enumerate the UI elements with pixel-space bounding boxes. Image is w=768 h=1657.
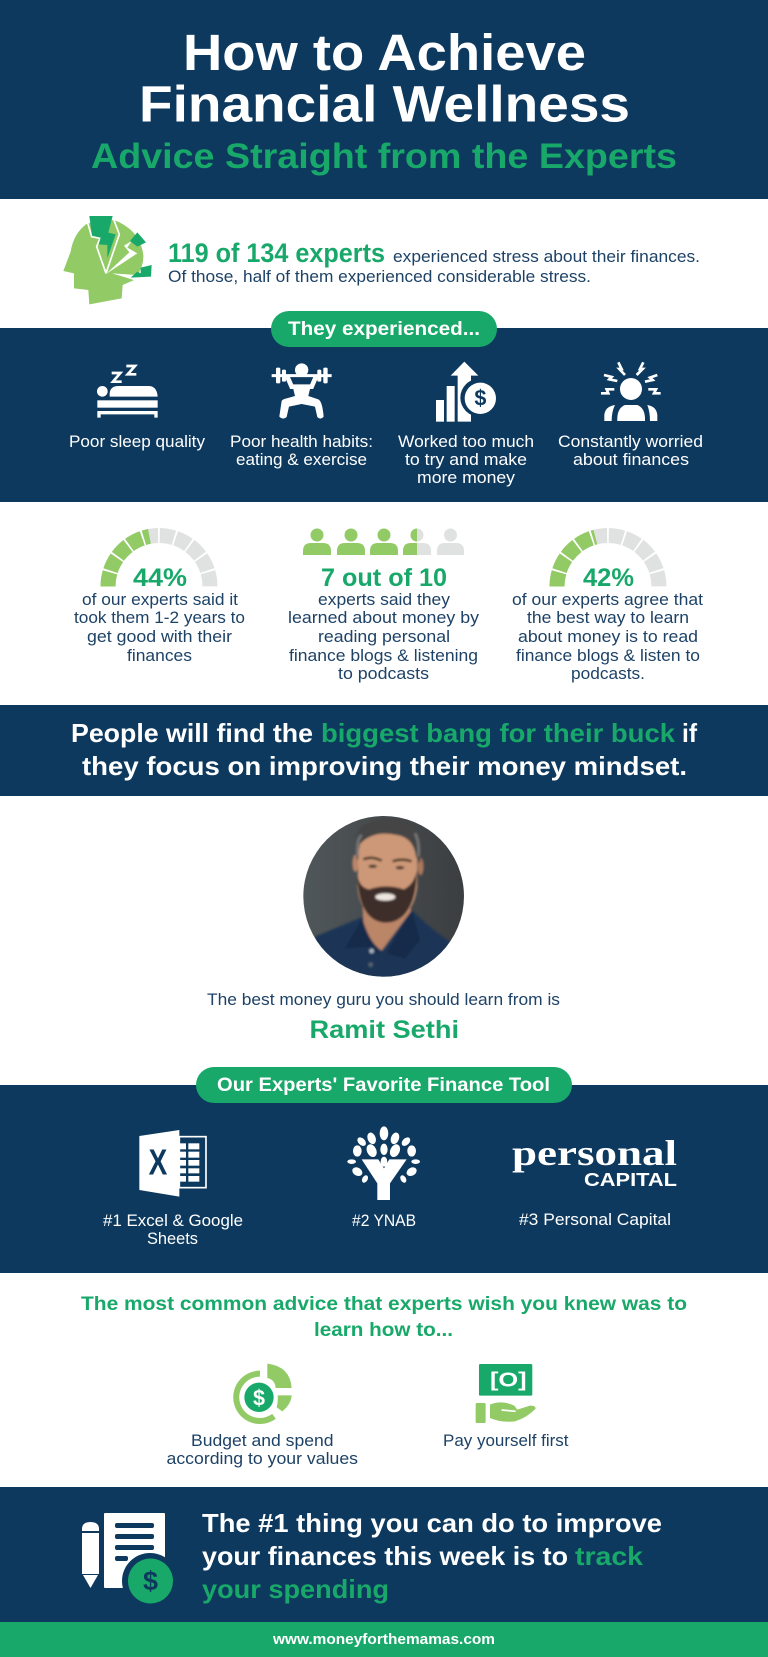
- title: [139, 24, 630, 132]
- label: constantly worried: [558, 432, 703, 469]
- pill heading: [196, 1067, 572, 1103]
- subtitle: Advice Straight from the Experts: [91, 137, 677, 176]
- gauge: 44 percent: 44%: [133, 564, 187, 592]
- label: ynab: #2 YNAB: [352, 1211, 416, 1230]
- text: 7 out of 10: experts said they: [318, 590, 451, 609]
- icon: spending tracker: [82, 1513, 178, 1609]
- statistic text: experienced stress about their finances.: [393, 247, 700, 266]
- text: 42 percent: the best way to learn: [527, 608, 689, 627]
- logo: Personal Capital: personal: [512, 1133, 677, 1173]
- gauge: 42 percent: [557, 536, 659, 592]
- gauge: 44 percent: [108, 536, 210, 592]
- icon: spending tracker: $: [143, 1566, 158, 1596]
- label: worked too much: [398, 432, 534, 487]
- guru intro text: The best money guru you should learn from is: [207, 990, 560, 1009]
- label: excel: #1 Excel & Google: [103, 1211, 243, 1230]
- statistic text: [168, 238, 700, 286]
- icon: YNAB tree: [347, 1126, 420, 1200]
- panel: statistics: [74, 528, 703, 683]
- text: 44 percent: get good with their: [87, 627, 232, 646]
- label: worked too much: to try and make: [405, 450, 527, 469]
- pill heading: They experienced...: [288, 319, 480, 340]
- text: 7 out of 10: [288, 590, 480, 683]
- icon: rising bars and coin: $: [474, 386, 486, 411]
- icon: budget pie: $: [253, 1385, 265, 1410]
- panel: header: [0, 0, 768, 199]
- logo: Personal Capital: CAPITAL: [584, 1170, 677, 1190]
- action text: The #1 thing you can do to improve: [202, 1508, 662, 1538]
- label: poor sleep: Poor sleep quality: [69, 432, 206, 451]
- footer: www.moneyforthemamas.com: [272, 1631, 495, 1648]
- panel: money mindset banner: [0, 705, 768, 796]
- panel: money mindset banner: biggest bang for their buck: [321, 718, 676, 748]
- pill heading: Our Experts' Favorite Finance Tool: [217, 1075, 550, 1096]
- photo: Ramit Sethi portrait: [303, 816, 464, 977]
- label: budget: [166, 1431, 358, 1468]
- icon: worried person: [601, 362, 661, 421]
- label: poor health: Poor health habits:: [230, 432, 373, 451]
- text: 7 out of 10: to podcasts: [338, 664, 429, 683]
- panel: they experienced: [0, 311, 768, 502]
- text: 44 percent: [74, 590, 245, 665]
- icon: weightlifter: [272, 363, 332, 419]
- panel: common advice: [81, 1293, 687, 1468]
- label: excel: [103, 1211, 243, 1248]
- text: 42 percent: about money is to read: [518, 627, 698, 646]
- text: 7 out of 10: reading personal: [318, 627, 450, 646]
- text: 44 percent: finances: [127, 646, 192, 665]
- heading: The most common advice that experts wish you knew was to: [81, 1293, 687, 1315]
- pictogram: people: [303, 528, 464, 555]
- icon: stressed head: [63, 216, 152, 304]
- label: budget: according to your values: [166, 1449, 358, 1468]
- title: How to Achieve: [183, 24, 586, 81]
- panel: number one action: [0, 1487, 768, 1622]
- text: 42 percent: of our experts agree that: [512, 590, 703, 609]
- panel: money mindset banner: if: [682, 718, 697, 748]
- panel: money mindset banner: People will find the: [71, 718, 313, 748]
- icon: budget pie: [236, 1364, 292, 1421]
- heading: [81, 1293, 687, 1341]
- icon: money in hand: [O]: [490, 1369, 527, 1392]
- panel: favorite finance tool: [0, 1067, 768, 1273]
- text: 42 percent: podcasts.: [571, 664, 645, 683]
- label: constantly worried: about finances: [573, 450, 689, 469]
- label: worked too much: Worked too much: [398, 432, 534, 451]
- text: 44 percent: of our experts said it: [82, 590, 238, 609]
- icon: Excel: [139, 1130, 206, 1197]
- logo: Personal Capital: [512, 1133, 677, 1190]
- action text: [202, 1508, 662, 1604]
- action text: your spending: [202, 1574, 389, 1604]
- icon: money in hand: [476, 1364, 536, 1423]
- label: poor health: eating & exercise: [236, 450, 367, 469]
- label: pay yourself: Pay yourself first: [443, 1431, 569, 1450]
- panel: money mindset banner: they focus on improving their money mindset.: [82, 751, 687, 781]
- statistic text: 119 of 134 experts: [168, 238, 385, 268]
- guru name: Ramit Sethi: [310, 1016, 459, 1044]
- pill heading: [271, 311, 497, 347]
- text: 7 out of 10: learned about money by: [288, 608, 480, 627]
- text: 7 out of 10: finance blogs & listening: [289, 646, 478, 665]
- text: 42 percent: [512, 590, 703, 683]
- footer: [0, 1622, 768, 1657]
- label: poor health: [230, 432, 373, 469]
- label: excel: Sheets: [147, 1229, 198, 1248]
- action text: your finances this week is to: [202, 1541, 568, 1571]
- label: constantly worried: Constantly worried: [558, 432, 703, 451]
- heading: 7 out of 10: 7 out of 10: [321, 564, 447, 592]
- title: Financial Wellness: [139, 76, 630, 132]
- label: worked too much: more money: [417, 468, 516, 487]
- action text: track: [575, 1541, 644, 1571]
- label: budget: Budget and spend: [191, 1431, 334, 1450]
- icon: Excel: X: [149, 1141, 167, 1182]
- panel: stress statistic: [63, 216, 700, 304]
- statistic text: Of those, half of them experienced considerable stress.: [168, 267, 591, 286]
- gauge: 42 percent: 42%: [583, 564, 634, 592]
- text: 44 percent: took them 1-2 years to: [74, 608, 245, 627]
- text: 42 percent: finance blogs & listen to: [516, 646, 700, 665]
- panel: money guru: [207, 813, 560, 1044]
- label: personal capital: #3 Personal Capital: [519, 1210, 671, 1229]
- icon: bed: [97, 366, 158, 418]
- heading: learn how to...: [314, 1319, 453, 1341]
- icon: rising bars and coin: [436, 362, 498, 422]
